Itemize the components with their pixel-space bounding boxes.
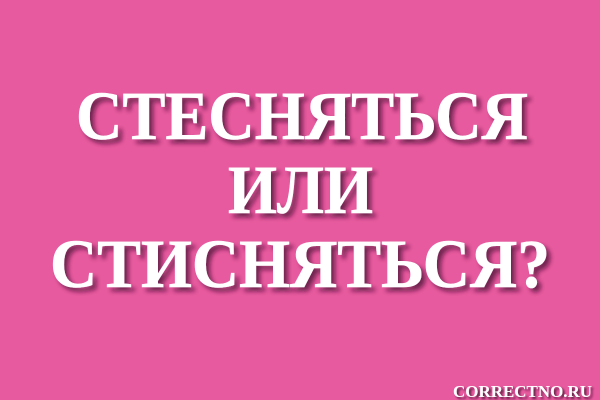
title line 3: СТИСНЯТЬСЯ? (50, 226, 550, 302)
title line 2: ИЛИ (228, 152, 373, 228)
title line 1: СТЕСНЯТЬСЯ (76, 78, 528, 154)
